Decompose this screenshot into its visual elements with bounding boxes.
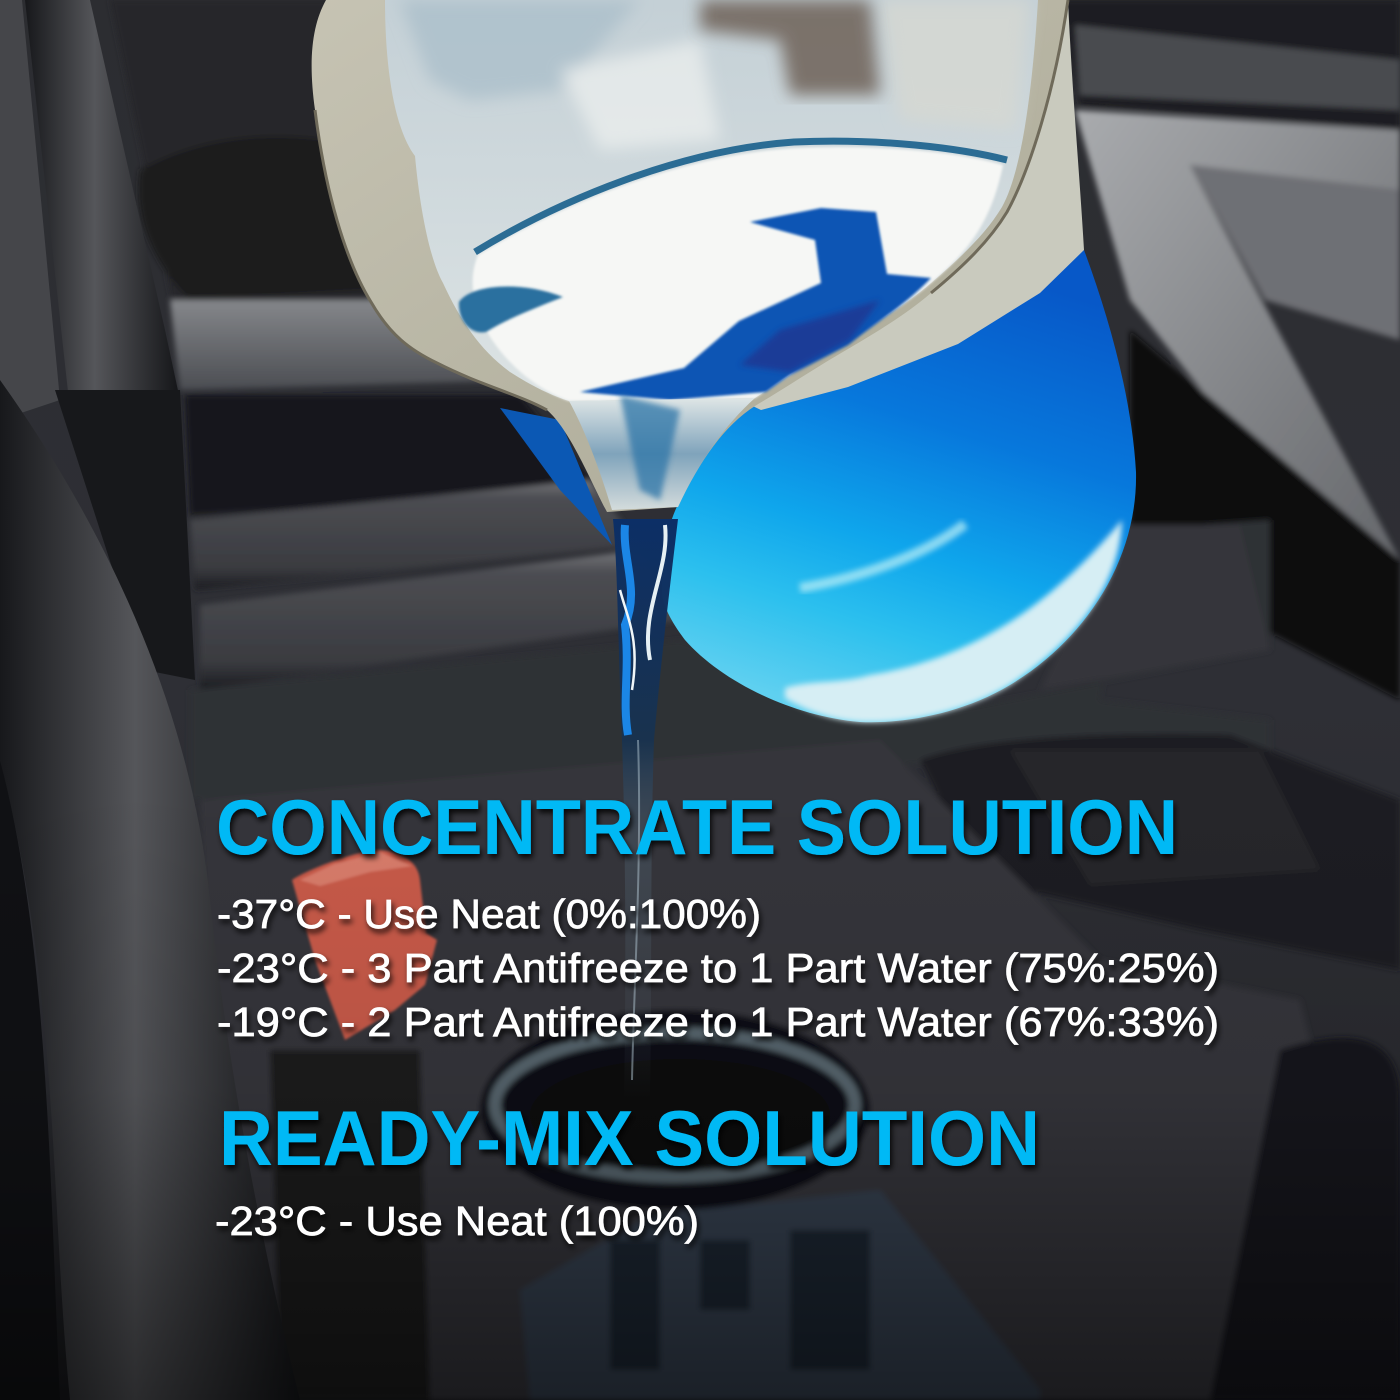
pouring stream bbox=[613, 519, 678, 1100]
beaker bbox=[312, 0, 1136, 722]
heading: ready-mix solution: READY-MIX SOLUTION bbox=[219, 1094, 1040, 1182]
beaker rim bbox=[312, 0, 1068, 512]
spout interior bbox=[569, 398, 755, 510]
text block: ready-mix ratio: -23°C - Use Neat (100%) bbox=[215, 1198, 699, 1244]
red reservoir bbox=[292, 850, 437, 1040]
beaker opening bbox=[385, 0, 1038, 401]
dark bottom vignette bbox=[0, 780, 1400, 1400]
foam band at bottom bbox=[785, 520, 1122, 722]
blue liquid bbox=[662, 250, 1136, 722]
blue arc of liquid surface bbox=[475, 141, 1007, 252]
text block: concentrate ratios: -19°C - 2 Part Antifreeze to 1 Part Water (67%:33%) bbox=[217, 999, 1219, 1045]
text block: concentrate ratios: -23°C - 3 Part Antifreeze to 1 Part Water (75%:25%) bbox=[217, 945, 1219, 991]
light streak in liquid bbox=[800, 524, 965, 588]
reflected object at top of beaker bbox=[700, 0, 880, 95]
text block: concentrate ratios bbox=[217, 891, 1219, 1045]
bright liquid surface bbox=[473, 147, 1003, 401]
black hoses at left bbox=[0, 0, 300, 1400]
beaker wall above liquid bbox=[740, 0, 1084, 410]
heading: concentrate solution: CONCENTRATE SOLUTION bbox=[216, 783, 1178, 871]
rim dark edges bbox=[315, 110, 547, 410]
left blue sliver behind spout bbox=[500, 408, 612, 545]
text block: concentrate ratios: -37°C - Use Neat (0%:100%) bbox=[217, 891, 761, 937]
scratches and reflection in upper glass bbox=[400, 0, 1030, 150]
blue swirl in liquid bbox=[580, 208, 931, 400]
small blue patch bbox=[459, 286, 563, 332]
